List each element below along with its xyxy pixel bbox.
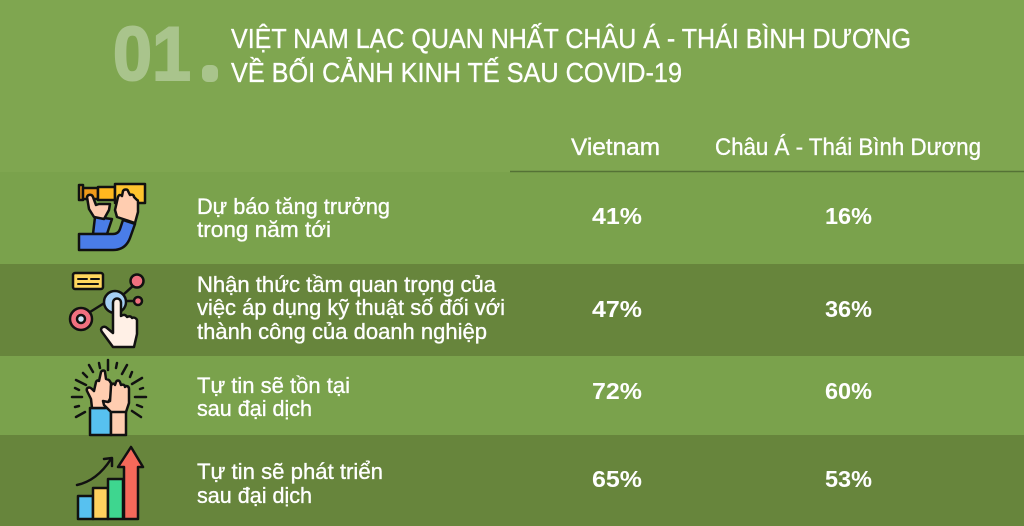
section number: 01 [113, 12, 191, 97]
row band: growth forecast [0, 172, 1024, 264]
column heading: Vietnam: Vietnam [571, 134, 660, 161]
row label: digital adoption: Nhận thức tầm quan trọng của [197, 272, 496, 297]
row label: confident to survive: sau đại dịch [197, 396, 312, 421]
icon: rising bar chart with arrow [77, 447, 143, 519]
value: Vietnam 47%: 47% [592, 296, 642, 322]
row label: digital adoption: thành công của doanh nghiệp [197, 319, 487, 344]
row band: confident to survive [0, 356, 1024, 435]
title: VIỆT NAM LẠC QUAN NHẤT CHÂU Á - THÁI BÌNH DƯƠNG [231, 23, 911, 54]
value: Vietnam 65%: 65% [592, 466, 642, 492]
column heading: Asia-Pacific: Châu Á - Thái Bình Dương [715, 134, 981, 161]
row label: growth forecast: trong năm tới [197, 217, 331, 242]
value: Asia-Pacific 36%: 36% [825, 296, 872, 322]
row label: digital adoption: việc áp dụng kỹ thuật số đối với [197, 295, 505, 320]
row label: growth forecast: Dự báo tăng trưởng [197, 194, 390, 219]
value: Asia-Pacific 16%: 16% [825, 203, 872, 229]
value: Vietnam 72%: 72% [592, 378, 642, 404]
icon: high five hands [72, 360, 146, 435]
icon: hands holding telescope [79, 184, 145, 250]
title: VỀ BỐI CẢNH KINH TẾ SAU COVID-19 [231, 56, 682, 88]
row label: confident to grow: Tự tin sẽ phát triển [197, 459, 383, 484]
row band: confident to grow [0, 435, 1024, 526]
value: Vietnam 41%: 41% [592, 203, 642, 229]
value: Asia-Pacific 53%: 53% [825, 466, 872, 492]
value: Asia-Pacific 60%: 60% [825, 378, 872, 404]
row label: confident to survive: Tự tin sẽ tồn tại [197, 373, 350, 398]
row band: digital adoption [0, 264, 1024, 356]
row label: confident to grow: sau đại dịch [197, 483, 312, 508]
icon: hand tapping network [70, 273, 144, 347]
title [231, 23, 911, 88]
